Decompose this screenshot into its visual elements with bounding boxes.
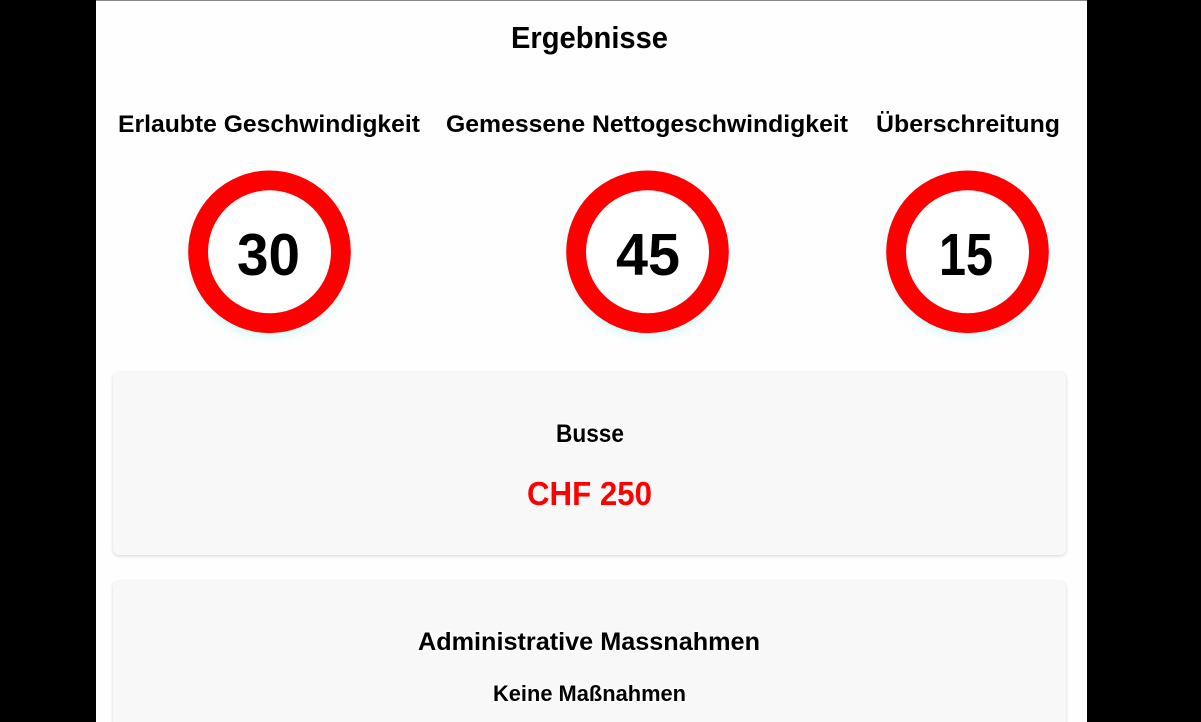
measures heading: Administrative Massnahmen [418,628,760,656]
title: Ergebnisse [511,20,668,55]
measures text: Keine Maßnahmen [493,681,686,706]
fine heading: Busse [556,420,624,448]
sign: measured speed 45: 45 [616,222,680,288]
sign: measured speed 45 [576,180,719,323]
label: allowed speed: Erlaubte Geschwindigkeit [118,111,420,138]
sign: allowed speed 30 [198,180,341,323]
panel: fine [113,372,1066,555]
label: excess: Überschreitung [876,111,1060,138]
sign: excess 15 [896,180,1039,323]
fine amount: CHF 250 [527,475,652,512]
sign: allowed speed 30: 30 [237,222,300,288]
sign: excess 15: 15 [939,222,993,288]
label: measured net speed: Gemessene Nettogeschwindigkeit [446,111,848,138]
panel: administrative measures [113,581,1066,722]
